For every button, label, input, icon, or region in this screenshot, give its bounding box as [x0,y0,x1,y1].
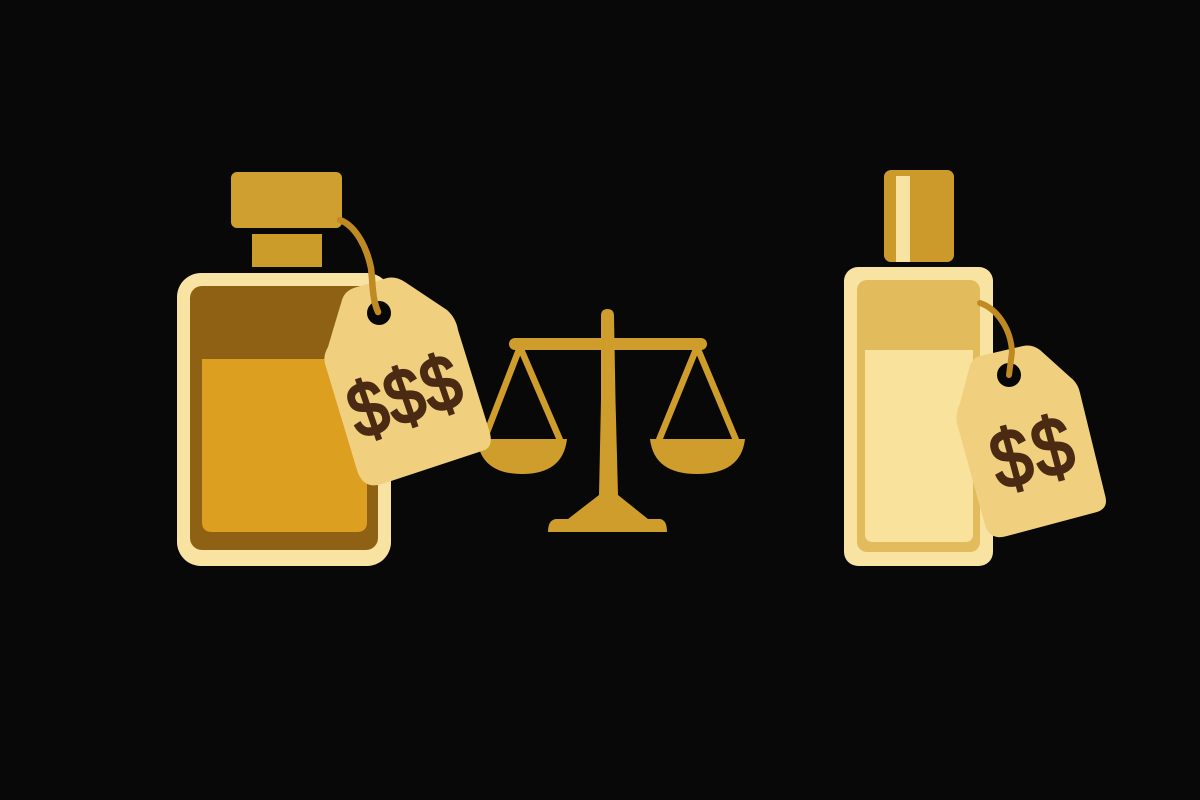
bottle cap [884,170,954,262]
icon: small affordable bottle [844,170,993,566]
bottle inner glass [857,280,980,552]
cap highlight [896,176,910,262]
bottle body [177,273,391,566]
icon: balance scale [477,309,745,532]
tag shape [956,346,1106,537]
bottle body [844,267,993,566]
tag string [340,220,378,312]
price label: $$$ [337,337,474,456]
right pan [650,439,745,474]
bottle inner glass [190,286,378,550]
bottle neck [252,234,322,267]
left pan strings [484,347,560,440]
left pan [477,439,567,474]
tag hole [997,363,1021,387]
scale post and base [548,309,667,532]
price tag: three dollars [324,220,491,485]
bottle cap [231,172,342,228]
bottle liquid [865,350,973,542]
tag string [980,303,1012,375]
right pan strings [659,347,736,440]
bottle liquid [202,359,367,532]
price label: $$ [981,397,1087,508]
scale beam [509,338,707,350]
price tag: two dollars [956,303,1106,537]
tag hole [367,301,391,325]
icon: large expensive bottle [177,172,391,566]
tag shape [324,278,491,485]
